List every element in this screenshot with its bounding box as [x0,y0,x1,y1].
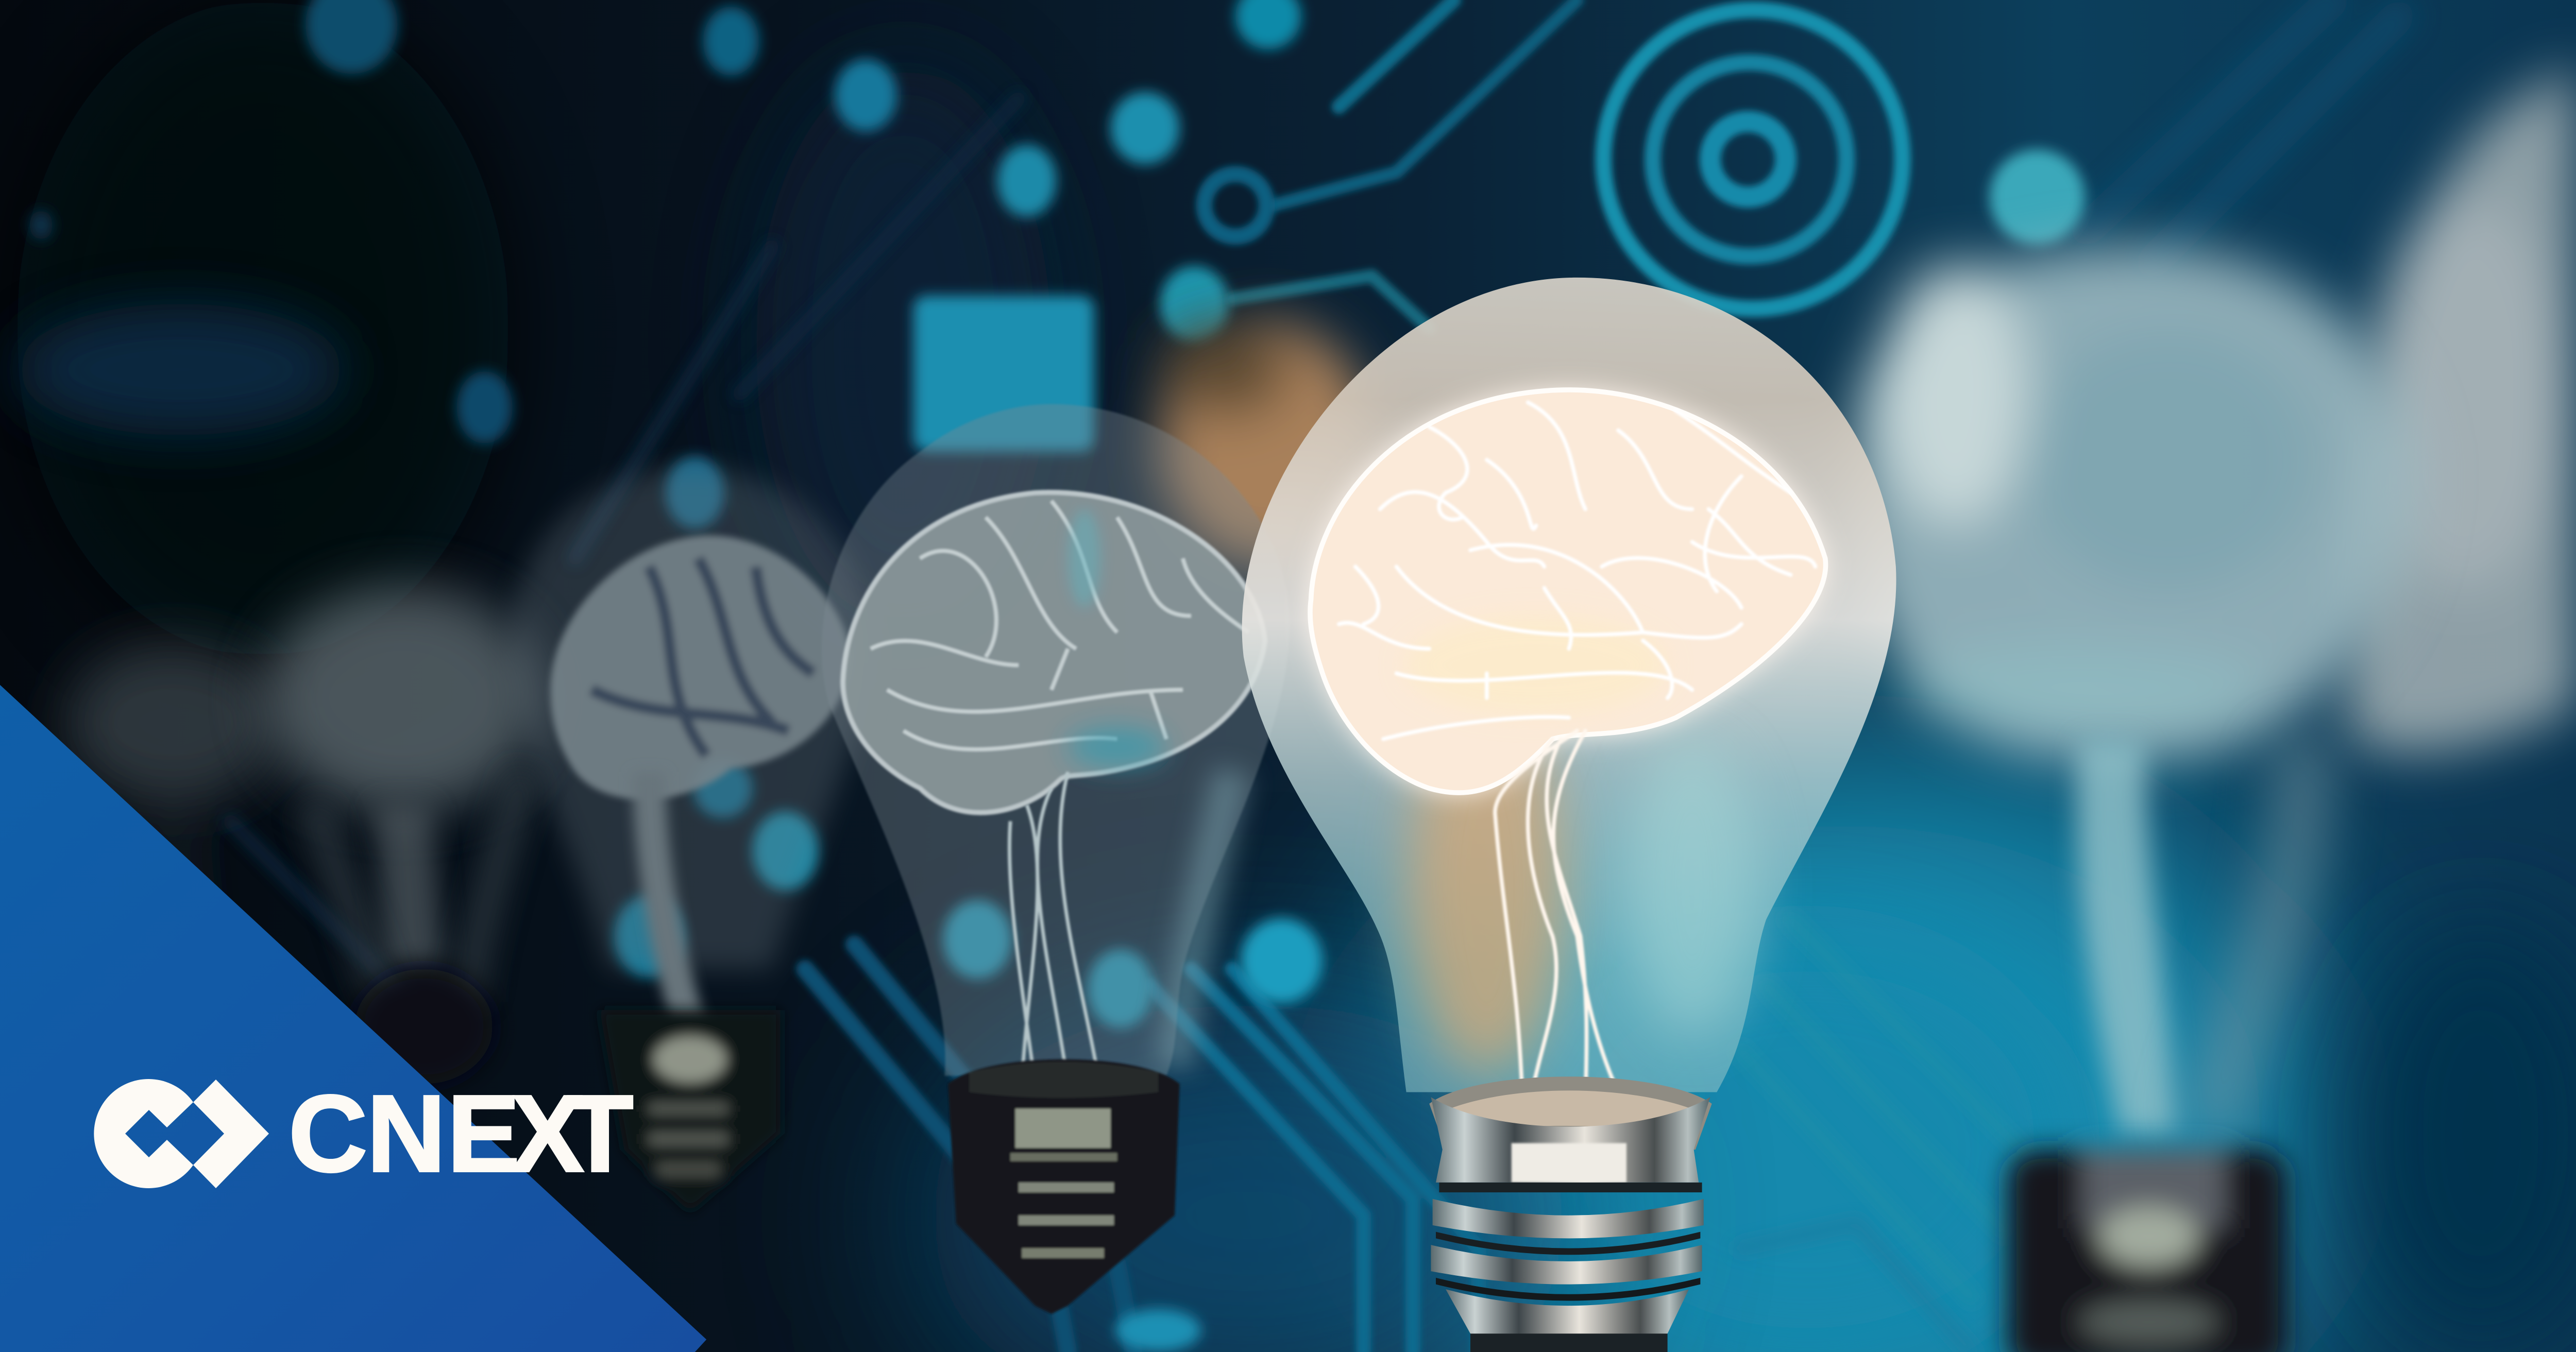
right bulb: stem [2077,739,2177,1133]
logo: wordmark: CNEXT [289,1072,634,1194]
background: blurred chip [913,296,1094,452]
CNEXT logo [94,1072,634,1194]
main bulb: glass [1242,278,1896,1092]
blue corner triangle panel [0,685,706,1352]
main bulb: halo around brain [1310,390,1826,793]
second bulb: screw base [948,1059,1180,1314]
third bulb: stem [649,772,698,1051]
third blurred bulb [510,468,871,1212]
third bulb: screw base [600,1010,781,1212]
second bulb: glass side reflection [1175,772,1232,1068]
fourth blurred bulb [263,586,542,1084]
faint far-left bulb [66,644,279,985]
third bulb: glass [510,468,871,969]
main bulb: pale teal right glass [1626,739,1758,1035]
second bulb: glass [822,404,1290,1076]
second bulb: filament stem [1009,772,1100,1092]
main brain: sulci [1339,402,1816,739]
background: target rings [1603,10,1903,309]
logo: chevron mark [94,1079,269,1188]
main brain: tissue [1310,390,1826,793]
main bulb: brain [1310,390,1826,793]
background: circuit ring node [1204,174,1267,236]
right blurred smoke cloud [2346,66,2576,752]
third bulb: brain [550,535,851,799]
right bulb: screw base [2008,1150,2287,1352]
second bulb [822,404,1290,1314]
right bulb: glass haze [1850,246,2417,762]
blurred right bulb [1850,246,2417,1352]
right bulb: side glass [2210,739,2302,1133]
main bulb: metal screw base [1429,1076,1712,1352]
background: blurred circuit dots [29,0,2085,1351]
second bulb: brain [843,492,1265,813]
main bulb: warm glow at stem [1408,698,1566,1076]
background: orange glow behind main bulb [1158,320,1372,567]
main bulb: filament stem [1495,731,1635,1125]
main glowing bulb [1242,278,1896,1352]
